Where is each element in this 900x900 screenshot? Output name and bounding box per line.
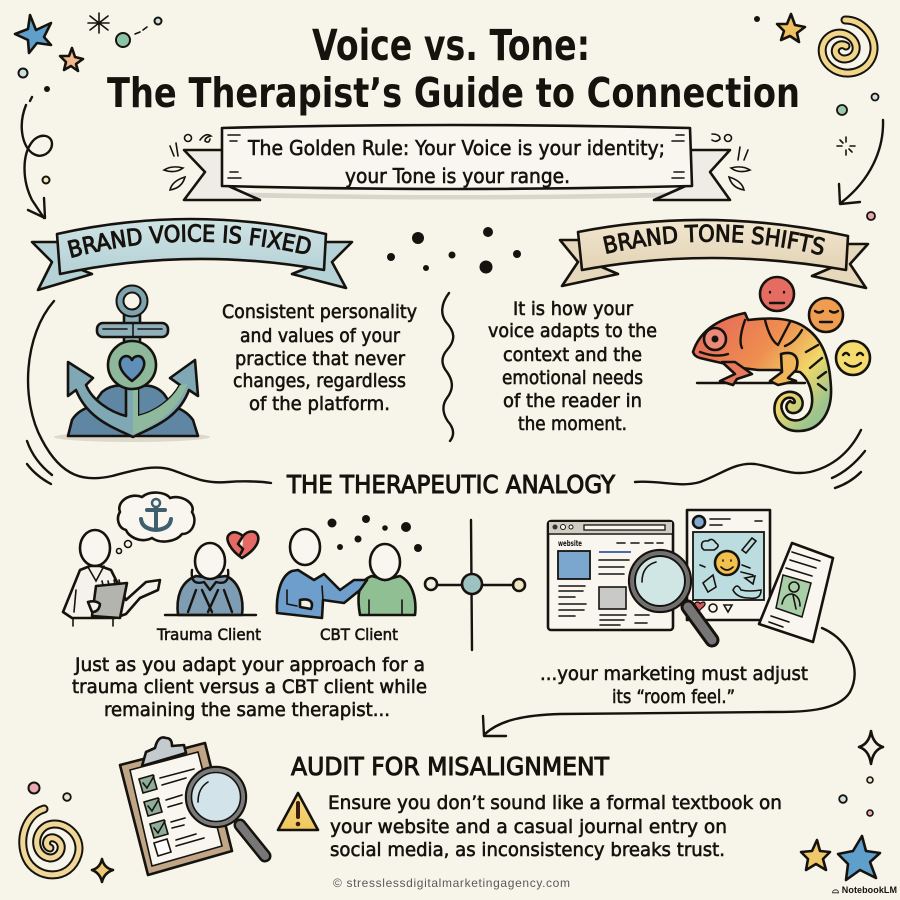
brand tone banner [558,218,870,290]
brand tone heading: BRAND TONE SHIFTS [602,224,826,255]
connector node [425,520,525,650]
watermark: © stresslessdigitalmarketingagency.com [333,876,570,890]
decoration: top right doodles [754,14,883,220]
notebooklm mark: ⌓ NotebookLM [832,885,897,895]
audit body text [328,792,782,861]
voice description text: and values of your [240,325,400,347]
icon: clipboard with checklist and magnifier [120,737,265,875]
icon: magnifying glass over website [629,550,712,640]
motion strokes left [27,441,52,484]
label: trauma client: Trauma Client [156,625,261,644]
icon: anchor with heart [54,289,210,442]
right sweeping curve [635,430,861,484]
left sweeping curve [28,301,271,483]
voice description text: of the platform. [249,393,390,415]
golden rule text: your Tone is your range. [345,164,570,188]
illustration: trauma client with broken heart [165,532,258,615]
voice description text [222,301,417,415]
audit body text: your website and a casual journal entry on [330,816,727,838]
voice description text: practice that never [235,348,405,370]
tone description text [488,298,657,435]
marketing text: its “room feel.” [612,686,735,708]
wavy vertical divider [442,293,453,441]
therapist analogy text: remaining the same therapist... [104,699,390,721]
icon: warning triangle [278,793,318,830]
therapist analogy text: Just as you adapt your approach for a [74,654,425,676]
scattered dots between banners [387,227,521,274]
section heading: the therapeutic analogy: THE THERAPEUTIC ANALOGY [286,470,616,499]
decoration: bottom left doodles [23,782,113,882]
brand voice banner [30,218,354,292]
tone description text: voice adapts to the [488,320,657,342]
label: CBT client: CBT Client [320,625,398,644]
decoration: bottom right doodles [801,731,883,880]
icon: chameleon with mood faces [693,277,870,431]
audit body text: Ensure you don’t sound like a formal textbook on [328,792,782,814]
therapist analogy text [72,654,427,721]
decoration: left swirl arrow [22,97,52,218]
brand voice heading: BRAND VOICE IS FIXED [67,224,311,258]
voice description text: changes, regardless [233,370,406,392]
illustration: therapist talking to CBT client [277,515,422,618]
title [107,21,800,117]
tone description text: the moment. [518,413,627,435]
tone description text: emotional needs [502,367,643,389]
therapist analogy text: trauma client versus a CBT client while [72,676,427,698]
illustration: website window: website [558,539,582,548]
arrow to audit section [483,628,855,736]
tone description text: of the reader in [503,390,642,412]
tone description text: It is how your [513,298,633,320]
illustration: social media post [687,510,770,620]
motion strokes right [832,451,865,488]
title: Voice vs. Tone: [312,21,590,71]
tone description text: context and the [503,344,642,366]
audit heading: AUDIT FOR MISALIGNMENT [291,752,610,781]
marketing text: ...your marketing must adjust [540,663,808,685]
illustration: printed brochure [759,543,833,642]
golden rule text: The Golden Rule: Your Voice is your identity; [247,136,665,160]
golden rule text [247,136,665,188]
audit body text: social media, as inconsistency breaks trust. [330,839,725,861]
voice description text: Consistent personality [222,301,417,323]
marketing text [540,663,808,708]
illustration: therapist with thought bubble [63,493,194,626]
decoration: top left doodles [15,13,162,184]
golden rule banner [164,125,750,200]
illustration: website window [548,521,673,630]
